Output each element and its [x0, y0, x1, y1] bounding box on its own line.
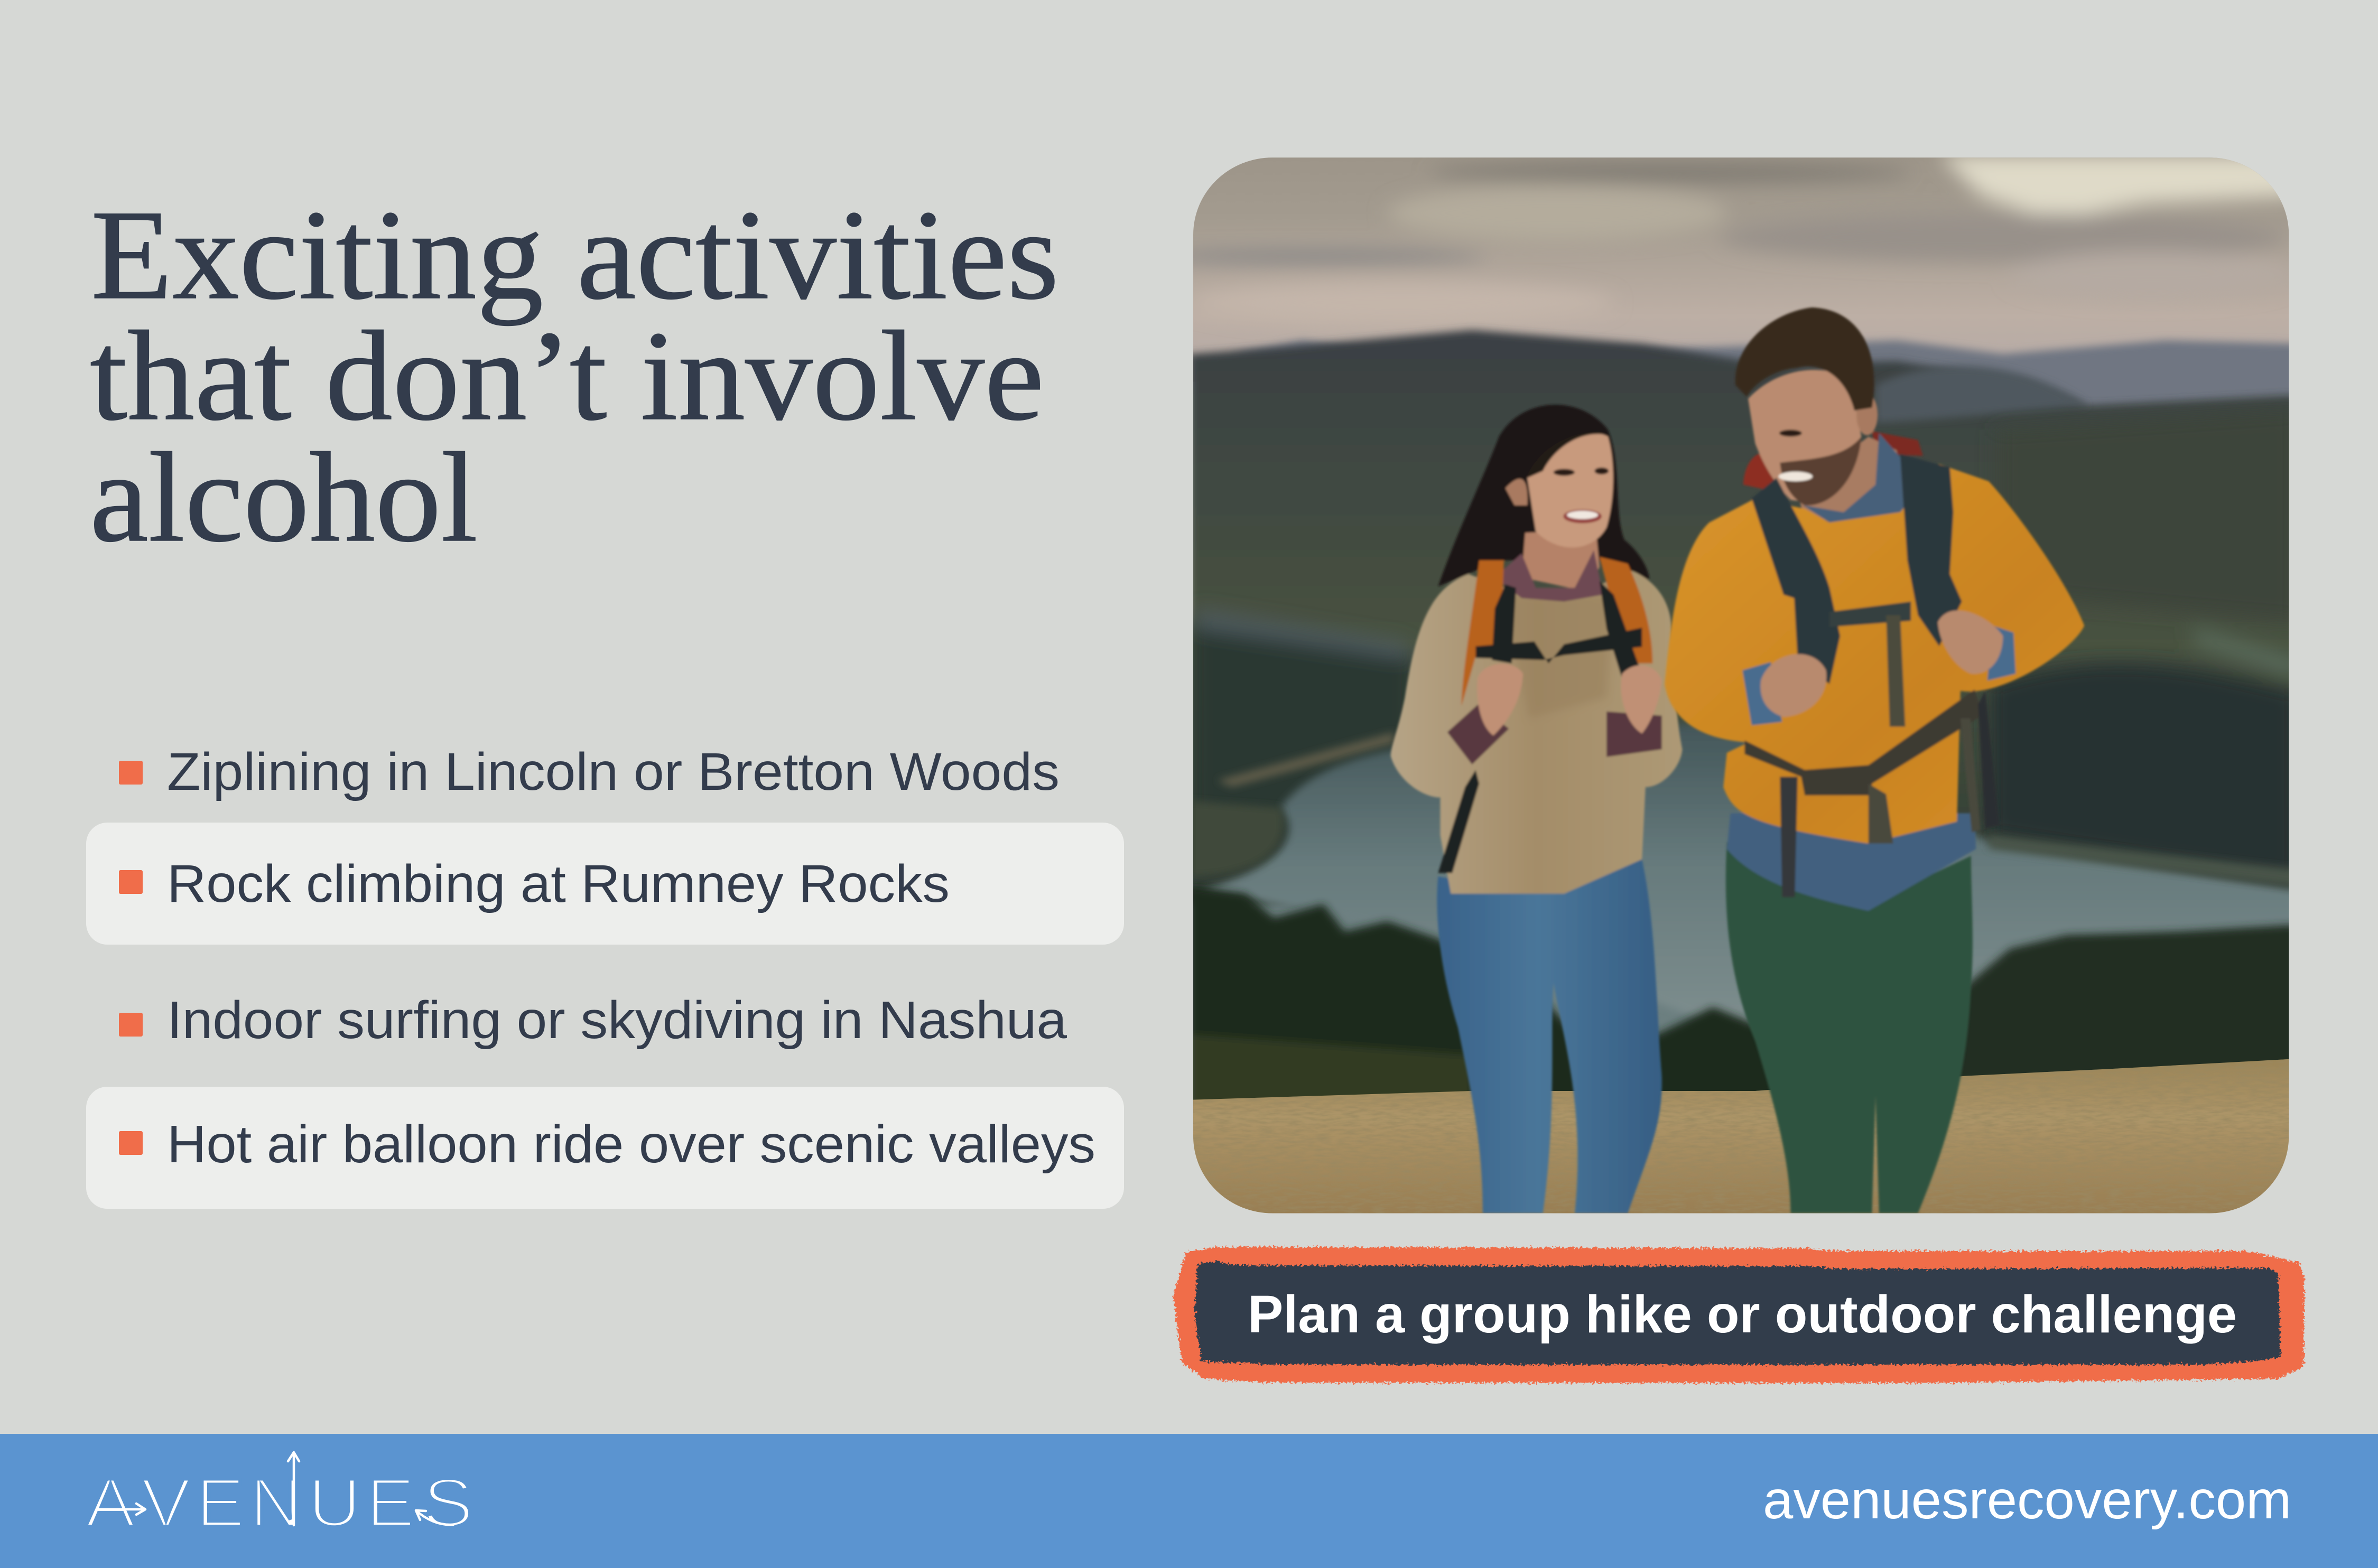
black straps	[1492, 584, 1516, 664]
list item: rock climbing: Rock climbing at Rumney Rocks	[167, 854, 950, 913]
distant mountains	[1231, 340, 2299, 436]
list item: rock climbing	[86, 823, 1124, 945]
logo: Avenues: A	[86, 1464, 135, 1541]
logo: Avenues	[86, 1452, 473, 1541]
list item: hot air balloon: Hot air balloon ride over scenic valleys	[167, 1115, 1095, 1174]
callout dark panel	[1195, 1261, 2281, 1365]
logo: Avenues: V	[141, 1464, 191, 1541]
orange backpack straps	[1462, 561, 1504, 706]
callout orange brushed frame	[1173, 1247, 2305, 1383]
plaid collar	[1495, 550, 1603, 602]
hair back	[1438, 405, 1649, 586]
denim cuffs	[1742, 662, 1782, 725]
sky	[1147, 148, 2299, 381]
callout text: Plan a group hike or outdoor challenge	[1248, 1285, 2237, 1344]
near treeline	[1189, 887, 2299, 1110]
title	[90, 183, 1059, 568]
hair	[1735, 307, 1874, 410]
list item: ziplining: Ziplining in Lincoln or Bretton Woods	[167, 742, 1060, 801]
neck and collar	[1798, 436, 1904, 522]
hands	[1760, 654, 1826, 717]
photo: couple hiking above a lake	[1147, 148, 2299, 1226]
rolling hills	[1189, 330, 2299, 1124]
backpack top	[1743, 453, 1775, 491]
neck	[1521, 529, 1600, 591]
jeans	[1437, 860, 1662, 1214]
beige sweater	[1391, 571, 1682, 894]
hands	[1477, 664, 1523, 735]
man hiker	[1665, 307, 2084, 1214]
mustard sweater	[1665, 464, 2084, 844]
list of activities	[86, 742, 1124, 1209]
list item: hot air balloon	[86, 1087, 1124, 1209]
icon: logo arrows	[97, 1452, 453, 1525]
website url: avenuesrecovery.com	[1763, 1470, 2291, 1530]
logo: Avenues: U	[308, 1464, 361, 1541]
plaid cuffs	[1447, 705, 1509, 764]
denim shirt hem	[1727, 813, 1976, 911]
logo: Avenues: E	[196, 1464, 245, 1541]
logo: Avenues: E	[366, 1464, 415, 1541]
lake	[1189, 718, 2299, 1034]
dark backpack straps	[1752, 478, 1840, 684]
green corduroy trousers	[1726, 842, 1973, 1214]
title: alcohol	[90, 426, 478, 568]
title: Exciting activities	[91, 183, 1059, 326]
hip belt	[1744, 689, 1983, 796]
callout: plan a group hike	[1173, 1247, 2305, 1383]
logo: Avenues: N	[250, 1464, 302, 1541]
face	[1527, 433, 1613, 547]
logo: Avenues: S	[423, 1464, 473, 1541]
dry grass field	[1189, 1059, 2299, 1226]
face	[1748, 370, 1861, 501]
footer bar	[0, 1434, 2378, 1568]
woman hiker	[1391, 405, 1682, 1214]
title: that don’t involve	[90, 304, 1044, 447]
list item: indoor surfing: Indoor surfing or skydiving in Nashua	[167, 991, 1067, 1050]
